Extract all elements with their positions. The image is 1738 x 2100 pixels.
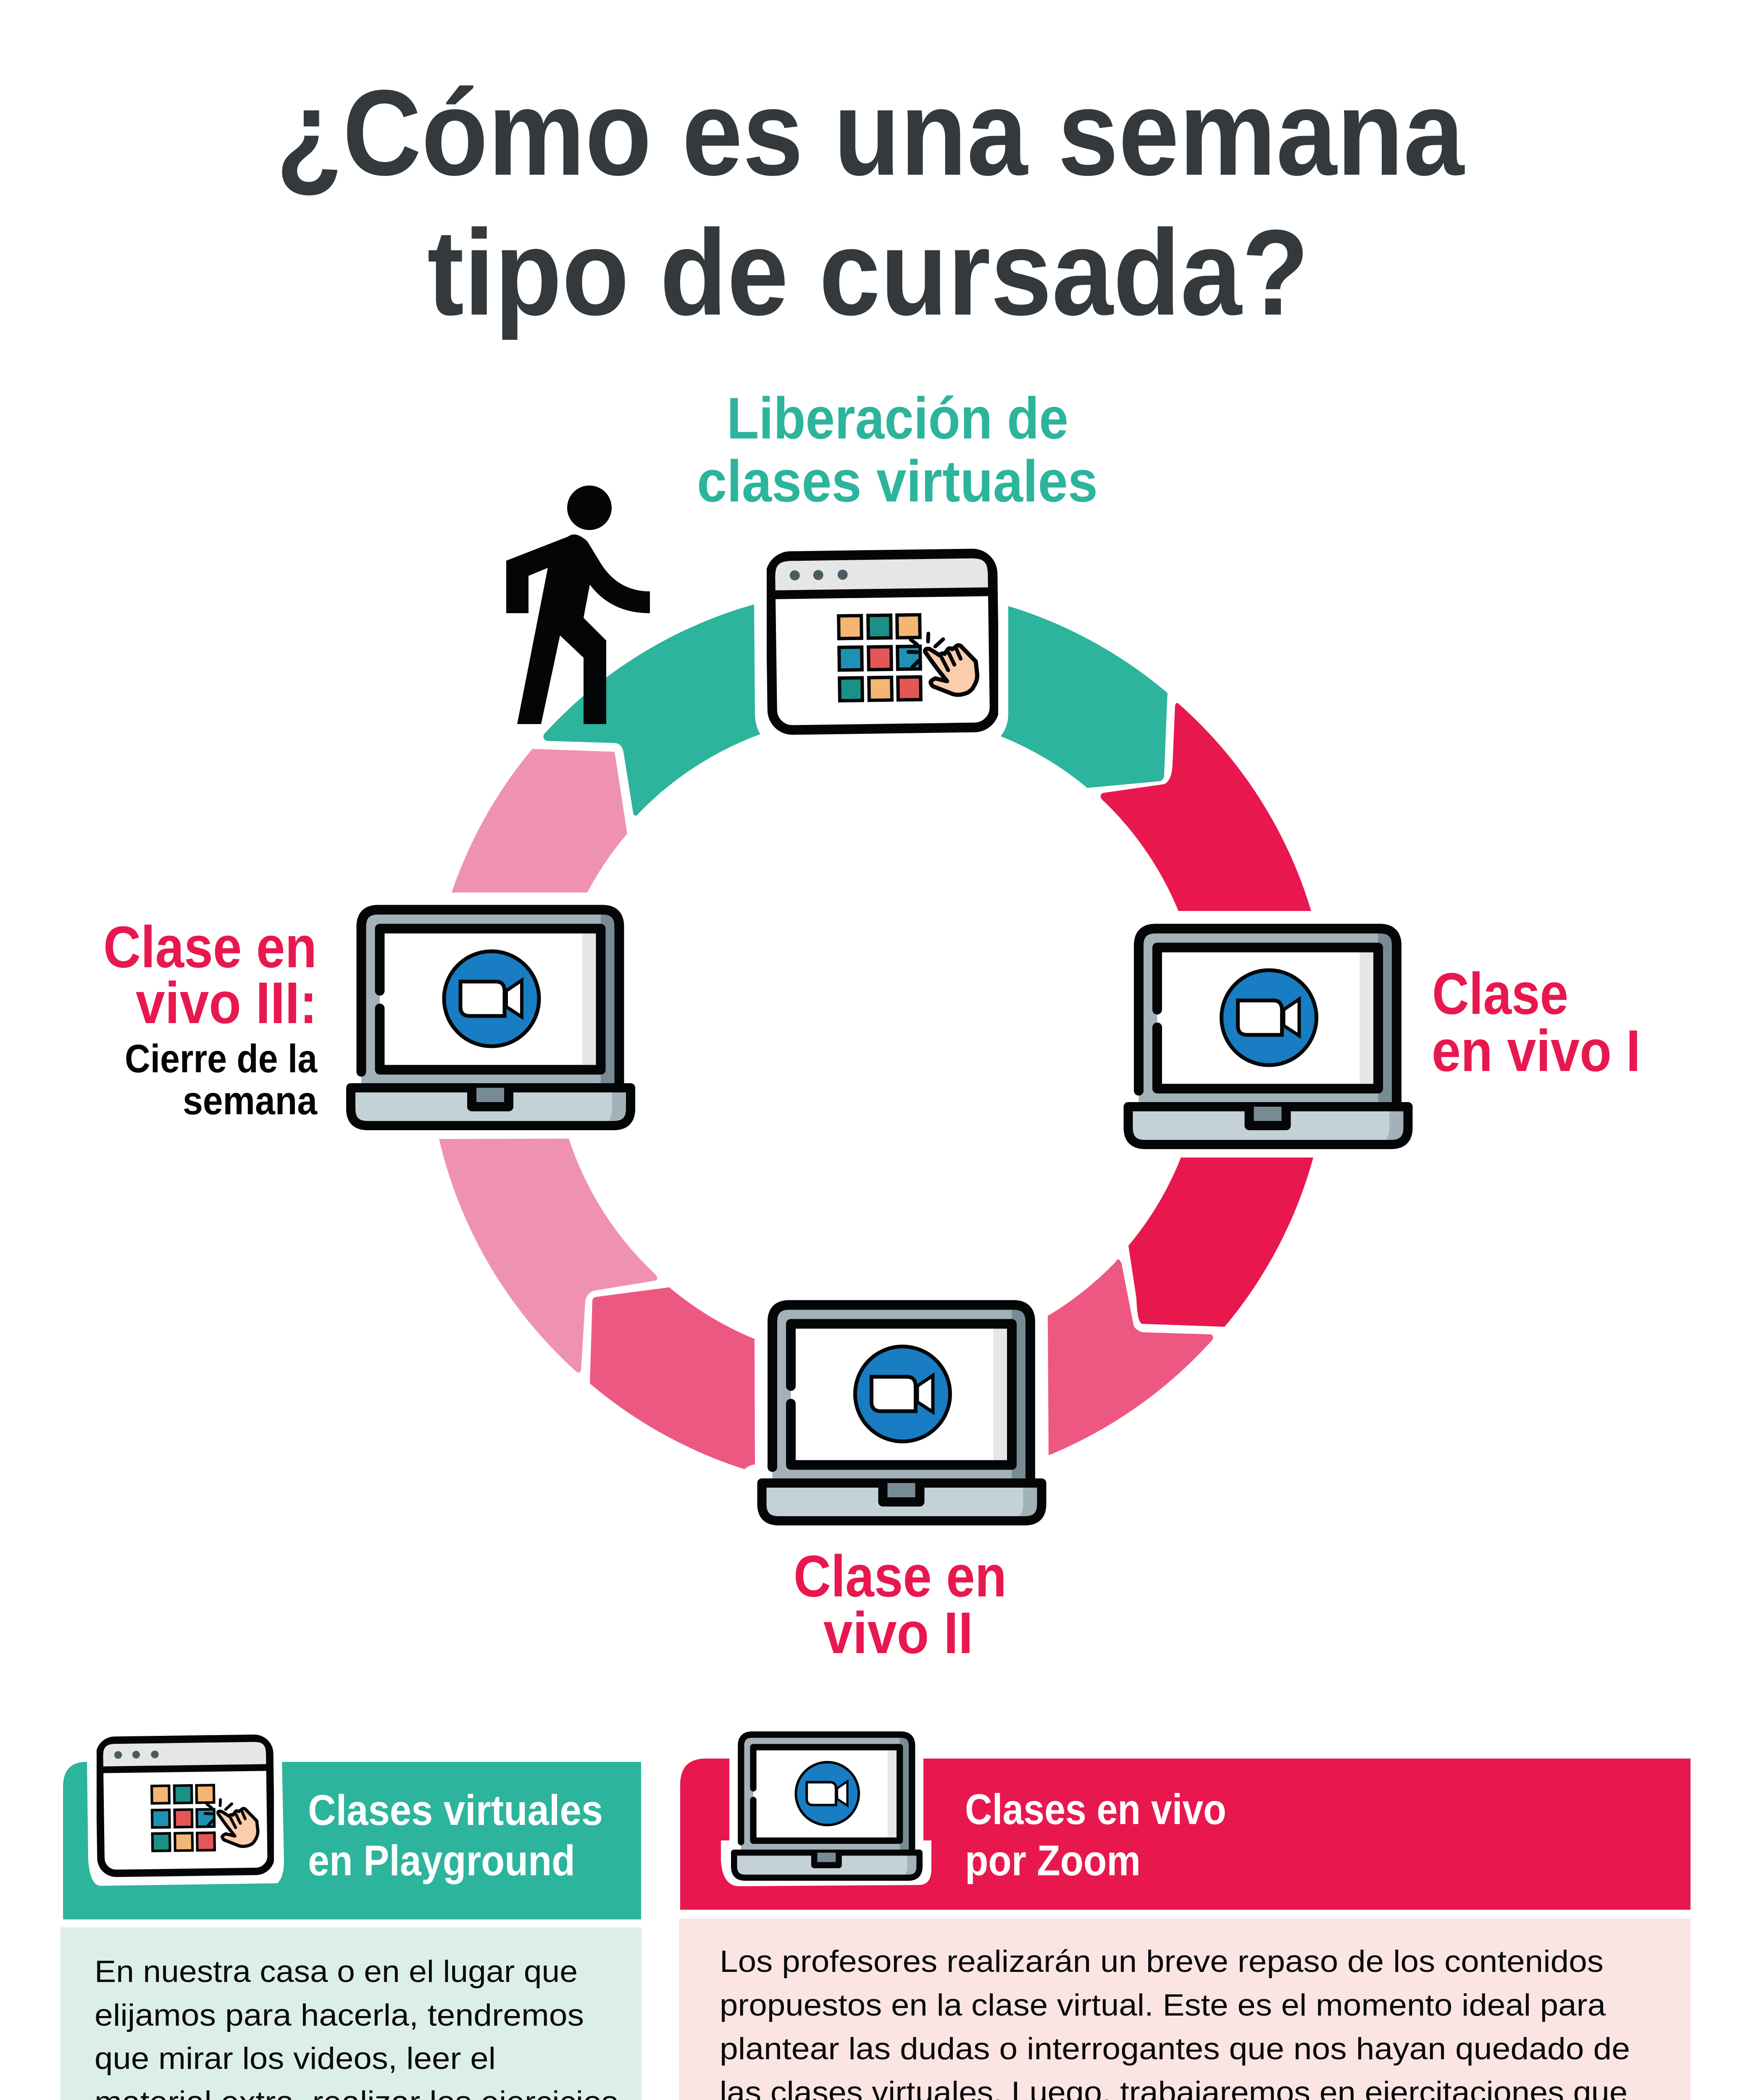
body text bbox=[95, 1955, 618, 2100]
label: Clase en vivo I bbox=[1432, 961, 1641, 1084]
icon: browser small bbox=[99, 1738, 271, 1874]
arrow segment: red upper bbox=[1101, 703, 1311, 911]
label: Clase en vivo I: en vivo I bbox=[1432, 1018, 1641, 1084]
body text: Los profesores realizarán un breve repaso de los contenidos bbox=[720, 1945, 1604, 1979]
header text: Clases virtuales bbox=[308, 1786, 603, 1834]
header text bbox=[965, 1785, 1226, 1885]
label: Liberación de clases virtuales: Liberación de bbox=[727, 385, 1068, 451]
label: Clase en vivo I: Clase bbox=[1432, 961, 1568, 1026]
label: Liberación de clases virtuales bbox=[697, 385, 1098, 514]
body text: plantear las dudas o interrogantes que nos hayan quedado de bbox=[720, 2032, 1630, 2066]
body text: propuestos en la clase virtual. Este es el momento ideal para bbox=[720, 1988, 1606, 2022]
label: Liberación de clases virtuales: clases virtuales bbox=[697, 448, 1098, 514]
label: Clase en vivo II bbox=[794, 1543, 1007, 1666]
arrow segment: medium pink left bbox=[590, 1287, 755, 1469]
label: Clase en vivo II: vivo II bbox=[823, 1600, 973, 1666]
icon: browser with tiles and hand bbox=[770, 553, 995, 730]
arrow segment: teal right bbox=[1001, 606, 1167, 788]
title bbox=[276, 65, 1465, 341]
arrow segment: red lower bbox=[1128, 1158, 1313, 1327]
label: Clase en vivo III, cierre de la semana bbox=[103, 914, 318, 1123]
icon backing bbox=[87, 1760, 284, 1886]
body text: que mirar los videos, leer el bbox=[95, 2042, 496, 2076]
cycle ring bbox=[439, 604, 1313, 1469]
title: ¿Cómo es una semana bbox=[276, 65, 1465, 201]
body text: elijamos para hacerla, tendremos bbox=[95, 1998, 584, 2032]
header text bbox=[308, 1786, 603, 1885]
label: Clase en vivo III, cierre de la semana: Clase en bbox=[103, 914, 317, 980]
arrow segment: medium pink right bbox=[1048, 1260, 1213, 1455]
arrow segment: light pink upper bbox=[452, 749, 627, 892]
title: tipo de cursada? bbox=[427, 205, 1309, 341]
teal header band bbox=[63, 1762, 641, 1919]
icon backing bbox=[721, 1759, 931, 1886]
red header band bbox=[680, 1759, 1691, 1910]
icon: walking person bbox=[506, 486, 650, 724]
icon: laptop left (Clase en vivo III) bbox=[351, 910, 631, 1126]
arrow segment: light pink lower bbox=[439, 1139, 657, 1373]
icon: laptop right (Clase en vivo I) bbox=[1128, 929, 1408, 1144]
body text: En nuestra casa o en el lugar que bbox=[95, 1955, 578, 1989]
label: Clase en vivo III, cierre de la semana: Cierre de la bbox=[125, 1037, 318, 1081]
header text: en Playground bbox=[308, 1837, 575, 1885]
panel: clases virtuales en Playground bbox=[60, 1738, 642, 2100]
body text bbox=[720, 1945, 1630, 2100]
label: Clase en vivo III, cierre de la semana: semana bbox=[183, 1079, 318, 1123]
header text: Clases en vivo bbox=[965, 1785, 1226, 1833]
body background bbox=[679, 1919, 1691, 2100]
label: Clase en vivo II: Clase en bbox=[794, 1543, 1007, 1609]
icon: laptop bottom (Clase en vivo II) bbox=[762, 1305, 1042, 1521]
arrow segment: teal left bbox=[544, 604, 760, 816]
panel: clases en vivo por Zoom bbox=[679, 1735, 1691, 2100]
header text: por Zoom bbox=[965, 1837, 1141, 1885]
label: Clase en vivo III, cierre de la semana: vivo III: bbox=[136, 970, 317, 1036]
body background bbox=[60, 1927, 642, 2100]
icon: laptop small bbox=[734, 1735, 920, 1878]
